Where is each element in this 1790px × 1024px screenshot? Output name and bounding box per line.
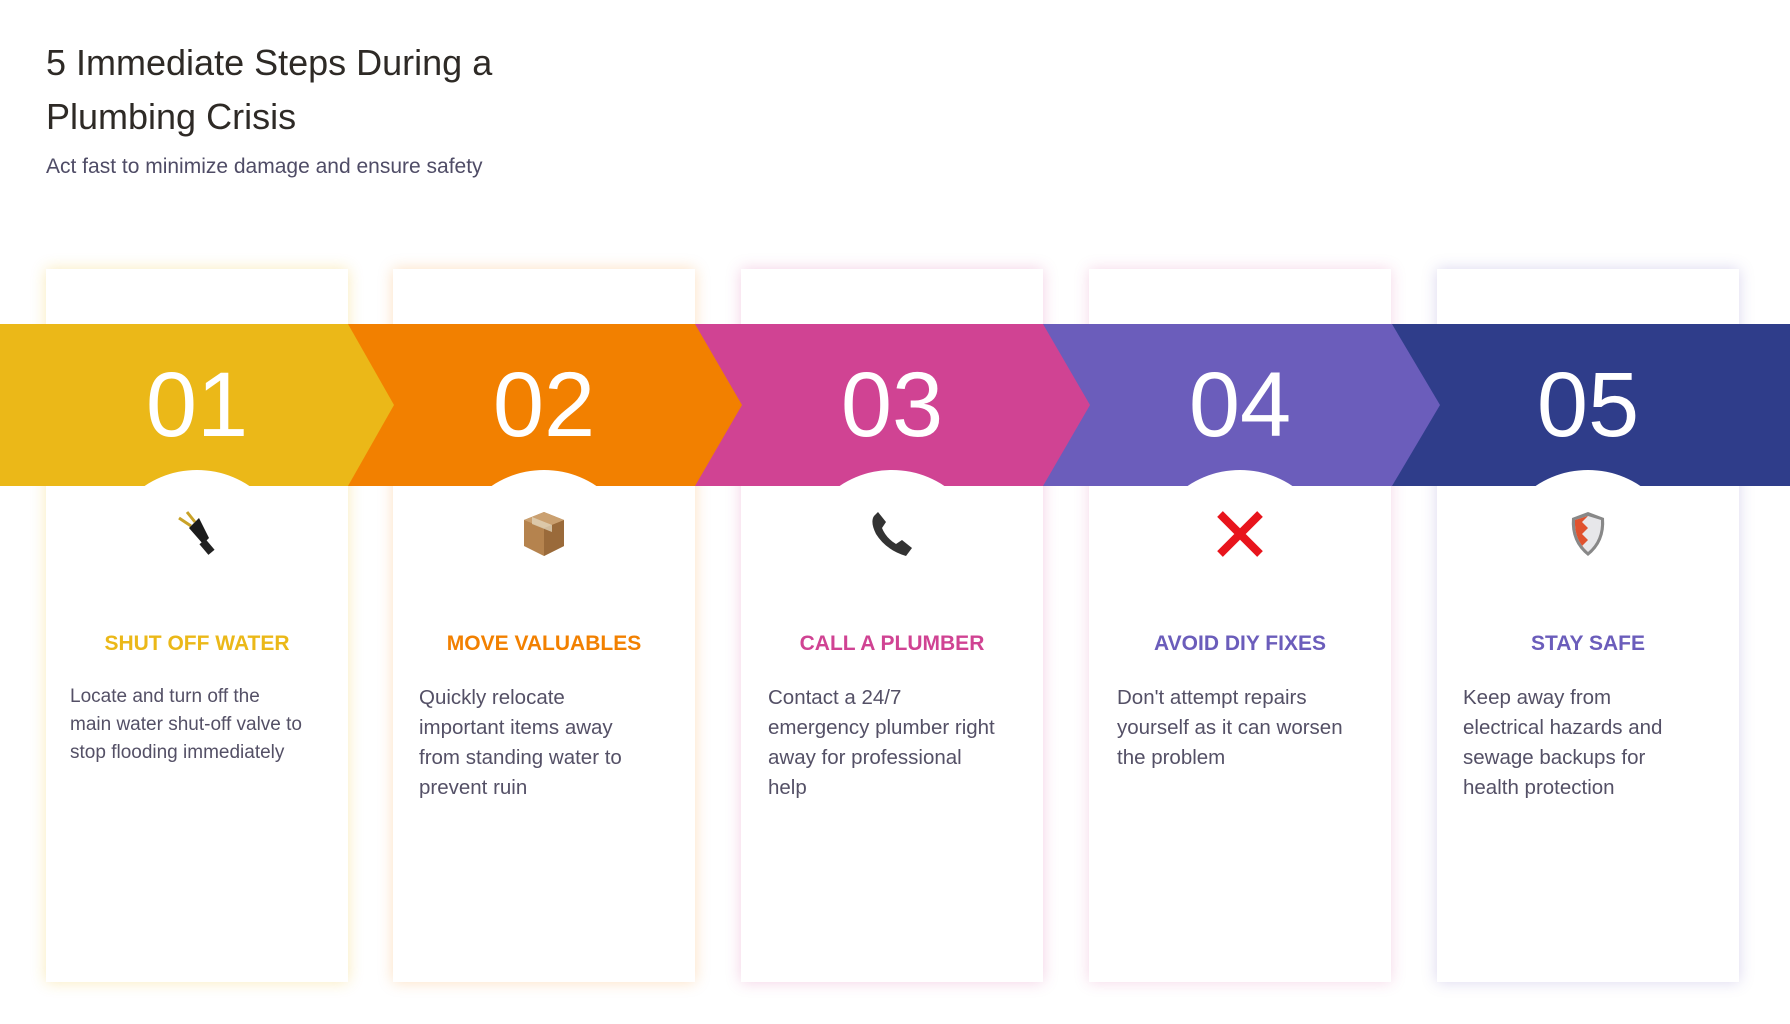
title — [46, 42, 492, 137]
card 4 — [1089, 269, 1391, 982]
body 4: the problem — [1117, 746, 1225, 769]
body 4: Don't attempt repairs — [1117, 686, 1307, 709]
body 5 — [1463, 686, 1662, 799]
subtitle: Act fast to minimize damage and ensure safety — [46, 155, 483, 178]
heading 4: AVOID DIY FIXES — [1154, 632, 1326, 655]
body 3: help — [768, 776, 807, 799]
body 2 — [419, 686, 622, 799]
card 5 — [1437, 269, 1739, 982]
number 04: 04 — [1189, 354, 1291, 456]
body 2: from standing water to — [419, 746, 622, 769]
body 1: stop flooding immediately — [70, 742, 284, 763]
body 2: prevent ruin — [419, 776, 527, 799]
icon: phone — [872, 512, 912, 556]
card 2 — [393, 269, 695, 982]
body 4: yourself as it can worsen — [1117, 716, 1343, 739]
body 5: electrical hazards and — [1463, 716, 1662, 739]
card 1 — [46, 269, 348, 982]
chevron band — [0, 324, 1790, 486]
body 3: away for professional — [768, 746, 962, 769]
title: 5 Immediate Steps During a — [46, 42, 492, 83]
icon: shield — [1572, 512, 1604, 556]
icon: box — [524, 512, 564, 556]
icon: plug — [178, 511, 214, 555]
heading 2: MOVE VALUABLES — [447, 632, 641, 655]
number 02: 02 — [493, 354, 595, 456]
body 1: Locate and turn off the — [70, 686, 260, 707]
body 1 — [70, 686, 302, 763]
body 3: emergency plumber right — [768, 716, 995, 739]
icon: cross — [1217, 511, 1263, 557]
heading 5: STAY SAFE — [1531, 632, 1645, 655]
body 2: important items away — [419, 716, 613, 739]
body 5: Keep away from — [1463, 686, 1611, 709]
heading 1: SHUT OFF WATER — [104, 632, 290, 655]
body 2: Quickly relocate — [419, 686, 565, 709]
body 3: Contact a 24/7 — [768, 686, 901, 709]
body 4 — [1117, 686, 1343, 769]
heading 3: CALL A PLUMBER — [800, 632, 984, 655]
body 3 — [768, 686, 995, 799]
card 3 — [741, 269, 1043, 982]
number 01: 01 — [146, 354, 248, 456]
number 03: 03 — [841, 354, 943, 456]
body 1: main water shut-off valve to — [70, 714, 302, 735]
number 05: 05 — [1537, 354, 1639, 456]
title: Plumbing Crisis — [46, 96, 296, 137]
body 5: sewage backups for — [1463, 746, 1645, 769]
body 5: health protection — [1463, 776, 1615, 799]
